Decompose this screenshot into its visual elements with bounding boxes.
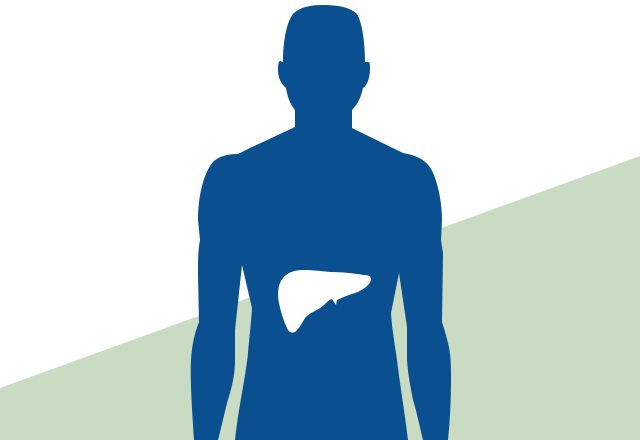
human body silhouette	[191, 5, 451, 440]
liver	[278, 270, 371, 333]
background green diagonal panel	[0, 156, 640, 440]
